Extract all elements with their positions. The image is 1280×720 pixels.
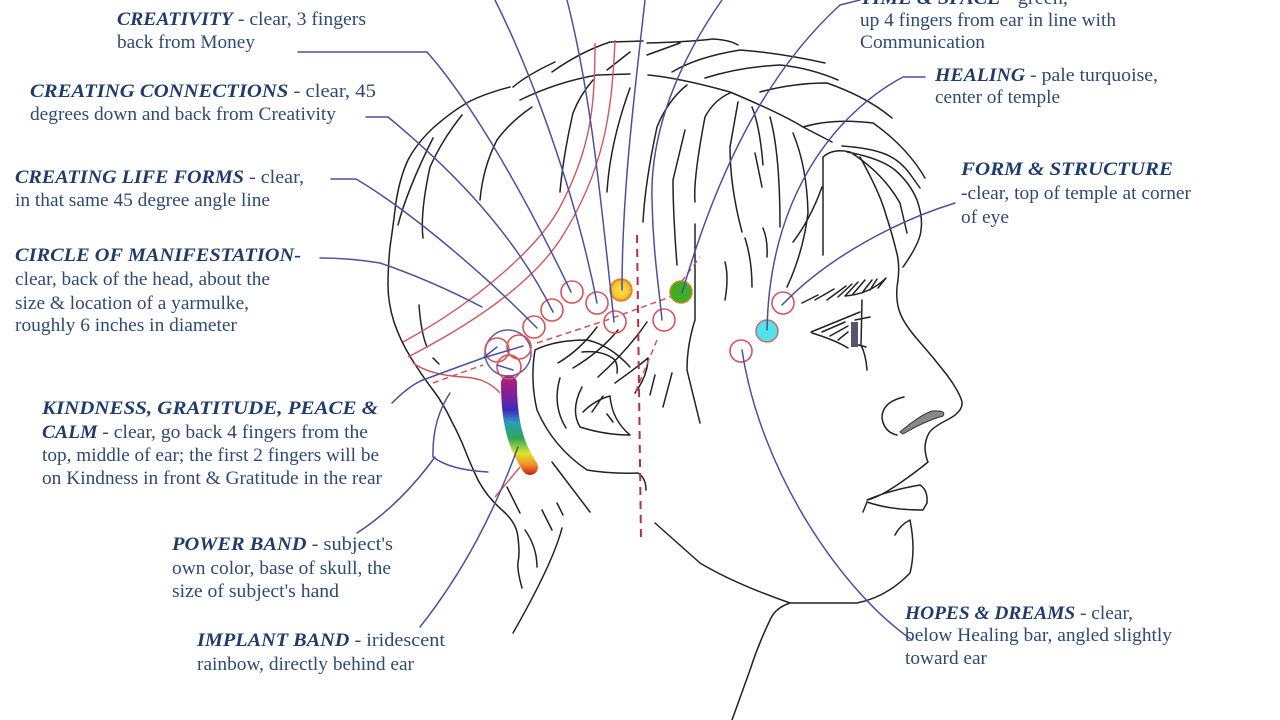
ear [533,340,646,490]
eyebrow [802,278,886,303]
nostril [900,411,944,434]
label: creating life forms [15,167,304,211]
label: healing: HEALING - pale turquoise, [934,65,1158,86]
eye [811,300,870,370]
label: form and structure: -clear, top of temple at corner [961,183,1192,204]
label: hopes and dreams [904,603,1173,669]
label: hopes and dreams: HOPES & DREAMS - clear, [904,603,1133,624]
label: hopes and dreams: below Healing bar, angled slightly [905,625,1173,646]
marker: healing turquoise [756,320,778,342]
label: implant band [196,630,446,675]
red placement guide lines [403,40,700,540]
circle of manifestation marker [485,330,531,379]
label: kindness, gratitude, peace and calm: on Kindness in front & Gratitude in the rear [42,468,383,489]
label: kindness, gratitude, peace and calm: KINDNESS, GRATITUDE, PEACE & [41,398,378,419]
label: creating life forms: in that same 45 degree angle line [15,190,270,211]
label: healing: center of temple [935,87,1060,108]
label: creating connections: degrees down and back from Creativity [30,104,336,125]
label: implant band: IMPLANT BAND - iridescent [196,630,446,651]
label: healing [934,65,1158,108]
label: power band: own color, base of skull, the [172,558,391,579]
label: kindness, gratitude, peace and calm: top, middle of ear; the first 2 fingers will be [42,445,379,466]
label: form and structure: of eye [961,207,1009,228]
label: circle of manifestation: CIRCLE OF MANIFESTATION- [15,245,301,266]
red clear-band markers [523,281,794,362]
label: power band: POWER BAND - subject's [171,534,393,555]
label: time and space [860,0,1117,53]
label: creativity: back from Money [117,32,255,53]
label: time and space: Communication [860,32,986,53]
label: circle of manifestation: roughly 6 inches in diameter [15,315,238,336]
label: creating connections: CREATING CONNECTIONS - clear, 45 [30,81,376,102]
label: form and structure: FORM & STRUCTURE [960,159,1173,180]
hair strands [398,39,925,300]
implant band: rainbow bar [509,383,530,467]
ear-line vertical guide [637,235,641,540]
label: hopes and dreams: toward ear [905,648,988,669]
label: kindness, gratitude, peace and calm [41,398,383,489]
label: kindness, gratitude, peace and calm: CALM - clear, go back 4 fingers from the [42,422,368,443]
label: circle of manifestation: clear, back of the head, about the [15,269,270,290]
outline: back of head and neck [388,87,522,588]
label: time and space: up 4 fingers from ear in line with [860,10,1117,31]
head line drawing [388,39,962,720]
label: circle of manifestation [15,245,301,336]
marker: gold band [610,279,632,301]
hair over the ear and nape [419,224,700,633]
nose [882,397,904,435]
label: power band: size of subject's hand [172,581,340,602]
label: creativity: CREATIVITY - clear, 3 fingers [117,9,366,30]
label: creativity [117,9,366,53]
label: power band [171,534,393,602]
label: creating connections [30,81,376,125]
label: form and structure [960,159,1192,228]
label: implant band: rainbow, directly behind ear [197,654,415,675]
marker: time and space green [670,281,692,303]
face profile [655,157,962,720]
label: creating life forms: CREATING LIFE FORMS - clear, [15,167,304,188]
label: circle of manifestation: size & location of a yarmulke, [15,293,249,314]
leader lines [298,0,955,640]
